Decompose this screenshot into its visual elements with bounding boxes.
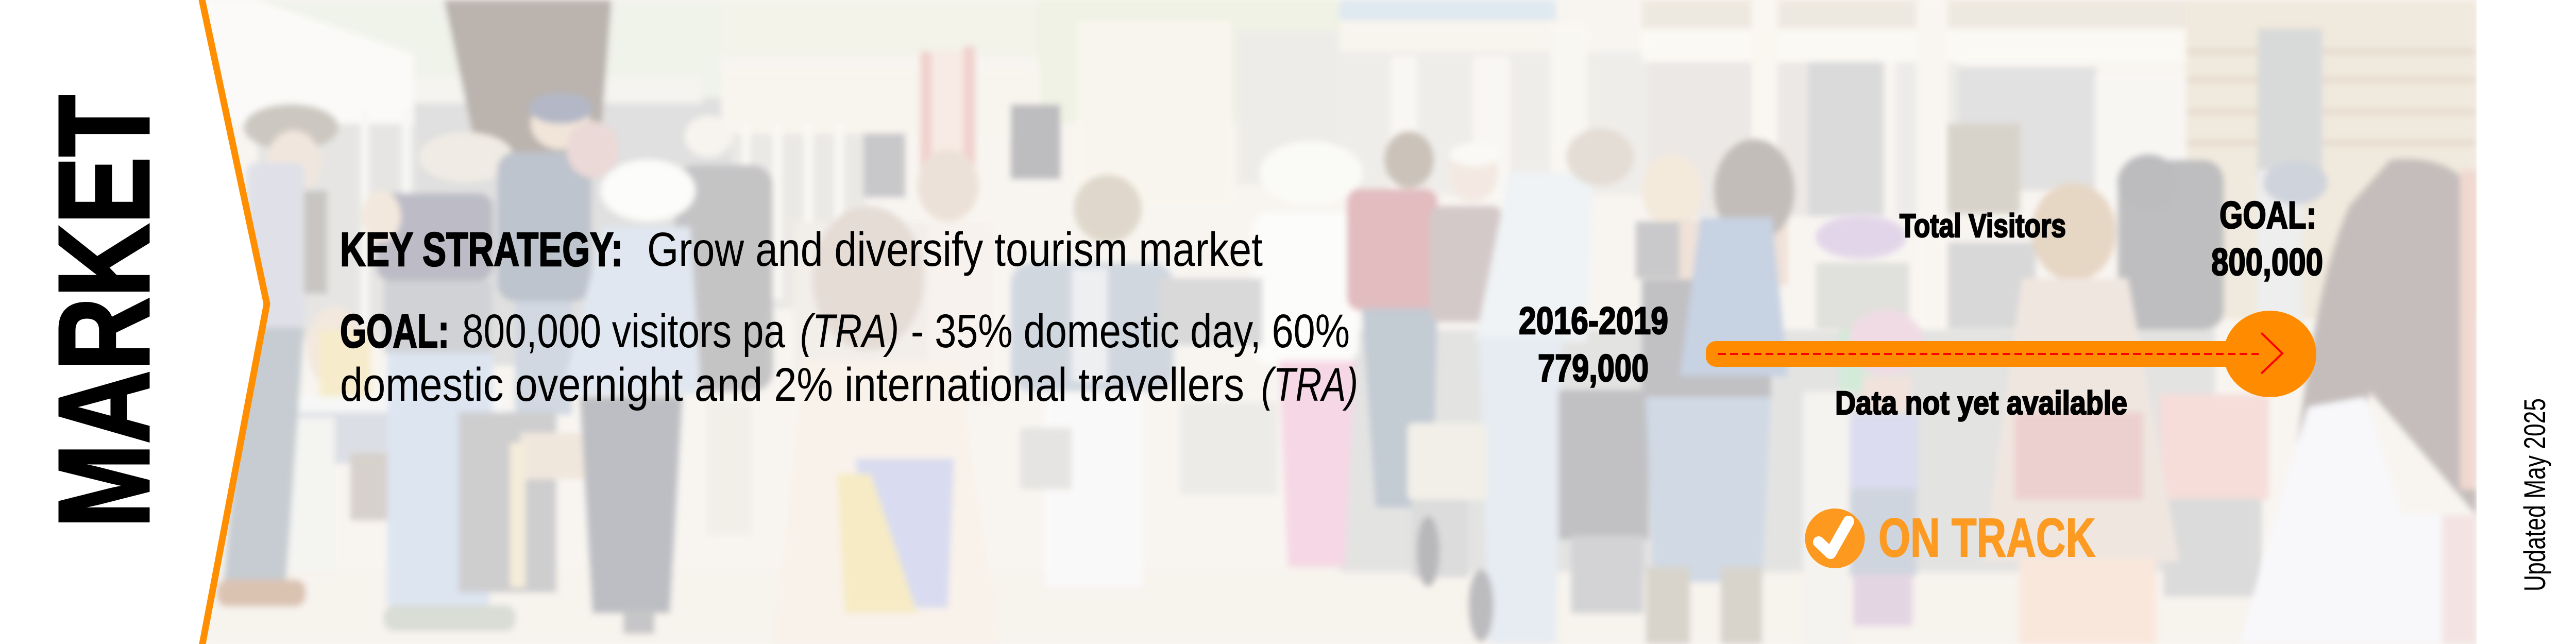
- person: denim jacket: [1074, 175, 1142, 243]
- person: white hat and pink pants: [1260, 142, 1361, 196]
- back people and shopfront: [807, 227, 810, 294]
- ground and dark lower band: [206, 567, 2267, 644]
- key strategy heading line: Grow and diversify tourism market: [647, 223, 1263, 276]
- stroller: [1558, 390, 1649, 539]
- person: navy shirt and cap: [497, 152, 591, 301]
- goal text block: (TRA): [800, 305, 899, 358]
- note: data not yet available: Data not yet available: [1835, 384, 2127, 421]
- updated date note: Updated May 2025: [2518, 398, 2552, 591]
- person: purple hat: [1816, 215, 1906, 259]
- left table: [289, 397, 505, 415]
- goal text block: (TRA): [1261, 359, 1358, 411]
- goal label: 800,000: GOAL:: [2219, 194, 2316, 236]
- baseline label: 2016-2019: [1519, 299, 1668, 389]
- child and woman with backpack: [1642, 155, 1702, 227]
- icon: orange check circle: [1805, 509, 1865, 568]
- person: elderly man, light shirt: [1476, 173, 1592, 341]
- blurred foreground woman: [812, 205, 956, 616]
- status: on track: [1805, 507, 2095, 568]
- progress arrow: [1706, 311, 2316, 397]
- goal text block: - 35% domestic day, 60%: [911, 305, 1350, 358]
- goal text block: domestic overnight and 2% international travellers: [340, 359, 1244, 411]
- people behind: [1948, 124, 2020, 214]
- goal label: 800,000: [2211, 194, 2323, 283]
- far-right blurred foreground figure: [2239, 159, 2477, 644]
- person: necklace woman: [1430, 206, 1502, 322]
- goal text block: 800,000 visitors pa: [462, 305, 786, 358]
- goal label: 800,000: 800,000: [2211, 241, 2323, 283]
- goal text block: GOAL:: [340, 305, 449, 358]
- progress chart: total visitors: [1519, 194, 2323, 421]
- child: pink hat and striped top: [1849, 310, 1923, 376]
- chevron orange edge: [201, 0, 267, 644]
- person: black shirt: [675, 165, 773, 392]
- seated person: [459, 412, 556, 592]
- back scene: [290, 6, 718, 94]
- person: striped shirt and hat: [244, 104, 338, 150]
- status label: ON TRACK: [1878, 507, 2095, 568]
- woman with glasses, floral dress: [2031, 183, 2116, 281]
- baseline label: 2016-2019: 779,000: [1538, 347, 1649, 389]
- person: white hat, floral blouse: [601, 160, 696, 222]
- person: red plaid: [1347, 189, 1437, 310]
- baseline label: 2016-2019: 2016-2019: [1519, 299, 1668, 342]
- left title panel: white chevron: [0, 0, 267, 644]
- key strategy heading line: [340, 223, 1263, 276]
- chart title: total visitors: Total Visitors: [1900, 207, 2066, 244]
- person: polo and wide hat: [419, 132, 514, 182]
- goal text block: [340, 305, 1358, 411]
- key strategy heading line: KEY STRATEGY:: [340, 223, 623, 276]
